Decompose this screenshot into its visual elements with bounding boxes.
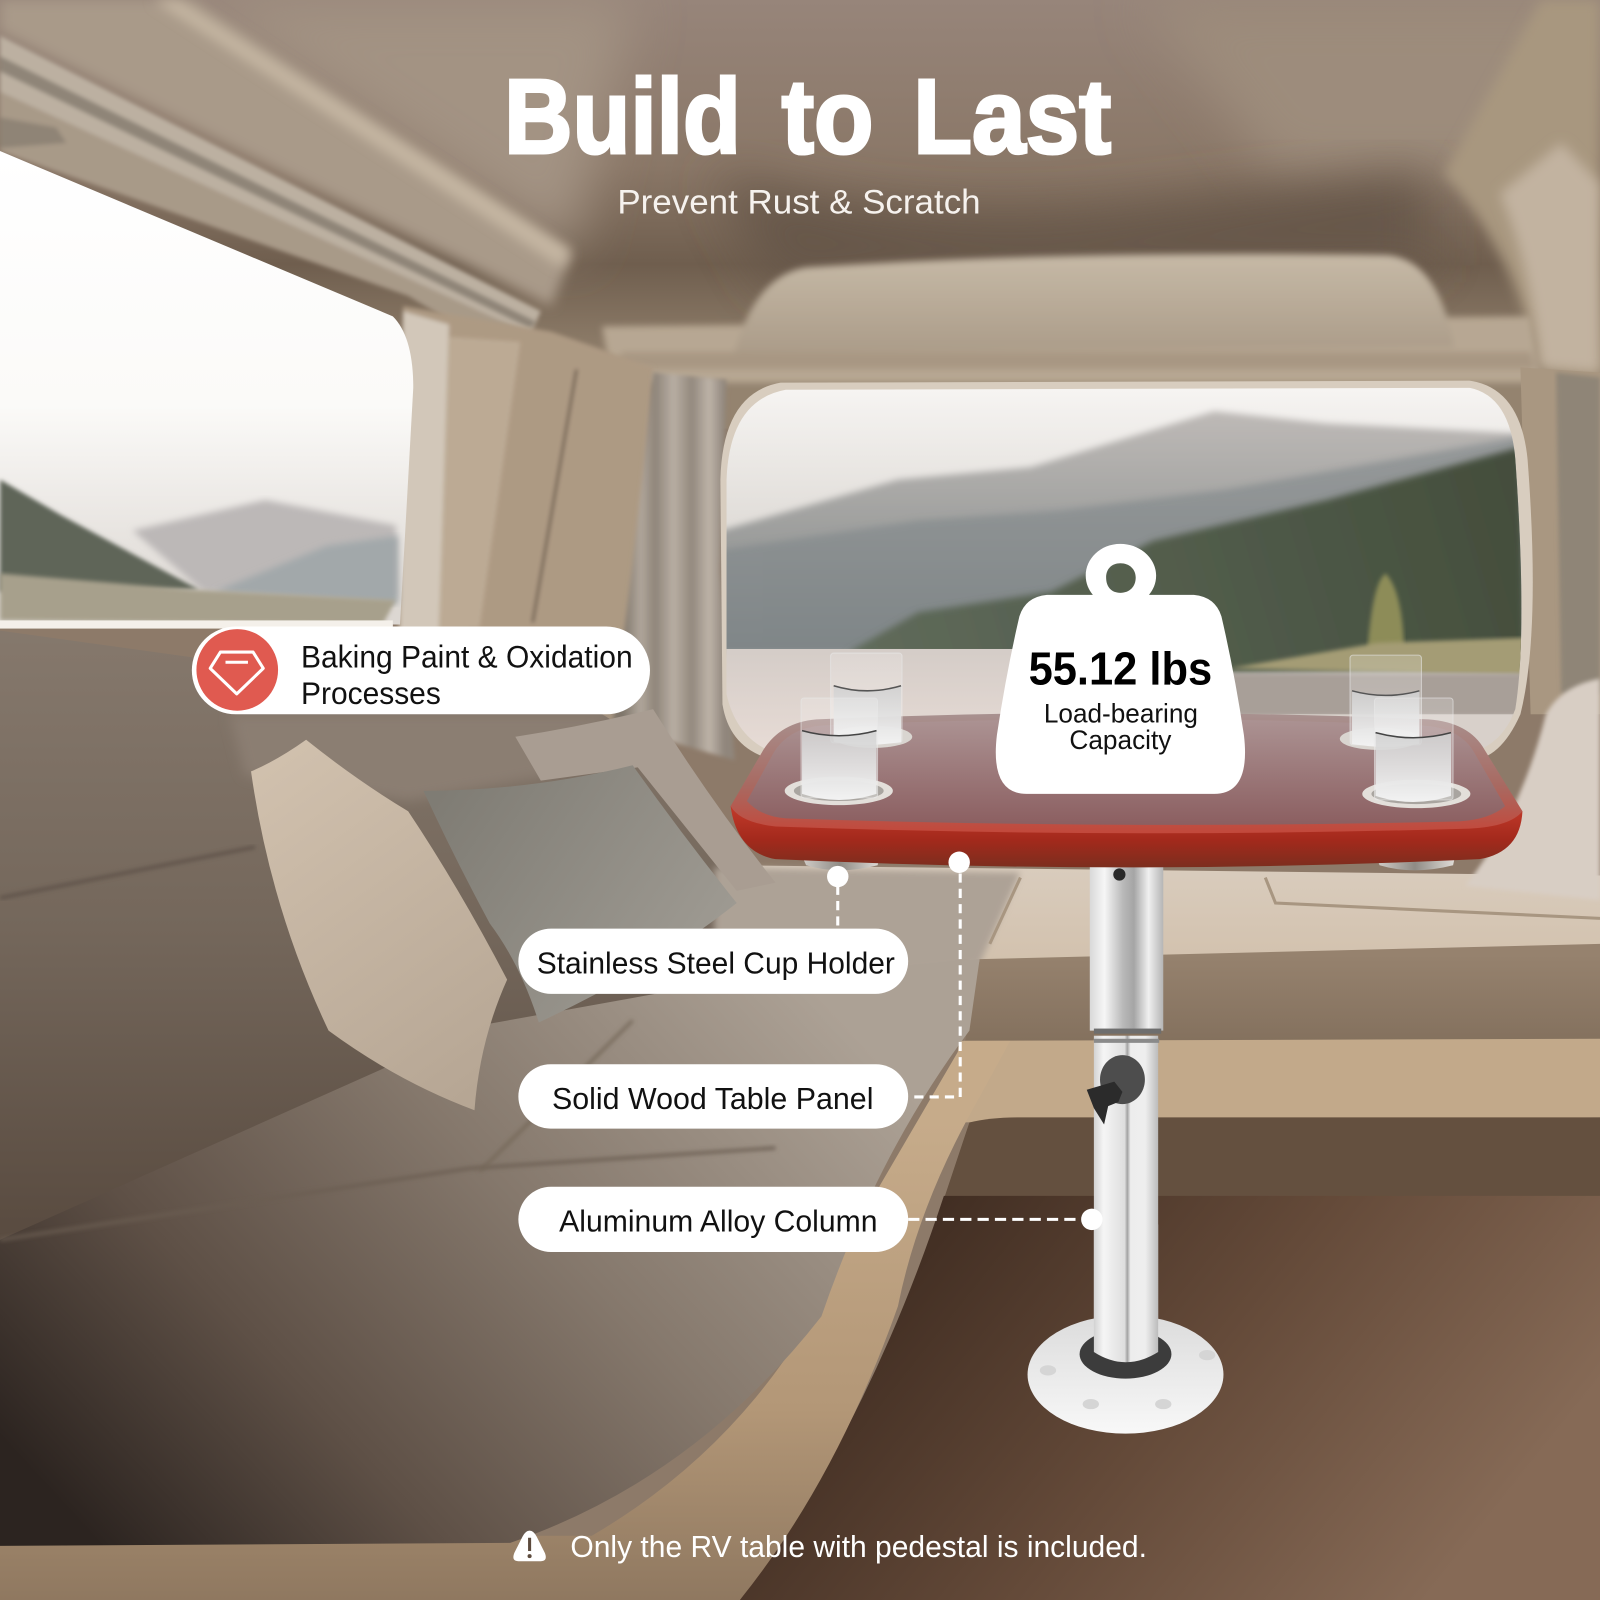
pillow: back grey [515, 709, 776, 891]
bench wooden trim [0, 1041, 1010, 1600]
leader: table panel [908, 852, 970, 1097]
callout: baking paint [192, 627, 650, 714]
capacity label: Load-bearing [1044, 698, 1198, 728]
title [504, 58, 1111, 176]
left window [0, 151, 413, 629]
label: aluminum alloy column: Aluminum Alloy Column [559, 1205, 878, 1239]
pedestal column [1090, 862, 1163, 1352]
icon: warning triangle [513, 1531, 546, 1561]
table panel [731, 713, 1522, 867]
trim and dark under-bench [944, 1039, 1600, 1199]
ceiling [0, 0, 1600, 429]
callout text: Baking Paint & Oxidation [301, 638, 633, 674]
callout text: Processes [301, 675, 441, 711]
callout text [301, 638, 633, 711]
label: aluminum alloy column [518, 1187, 908, 1252]
right wall [1520, 367, 1600, 714]
weight badge: load-bearing capacity [996, 544, 1245, 794]
cup holder rings and glasses [785, 653, 1470, 808]
pillow: beige [251, 740, 507, 1110]
floor [740, 1196, 1600, 1600]
weight shape [996, 544, 1245, 794]
overhead cabinet [602, 254, 1541, 383]
leader: column [908, 1209, 1103, 1230]
icon: diamond in red circle [196, 629, 278, 711]
cushion right [1465, 679, 1600, 900]
label: stainless steel cup holder [518, 929, 908, 994]
pedestal knob [1087, 1055, 1145, 1124]
product: RV table [731, 653, 1522, 1434]
pillow: grey [423, 765, 737, 1022]
title: Last [913, 58, 1111, 176]
leader: cup holder [827, 866, 848, 931]
title: to [782, 58, 873, 176]
capacity value: 55.12 lbs [1029, 643, 1212, 695]
label: solid wood table panel: Solid Wood Table Panel [552, 1082, 873, 1116]
footer note [513, 1530, 1147, 1564]
pedestal base [1028, 1224, 1223, 1434]
label: solid wood table panel [518, 1064, 908, 1129]
curtain [612, 372, 735, 760]
capacity label: Capacity [1069, 725, 1172, 755]
title: Build [504, 58, 741, 176]
sofa back [0, 631, 776, 1240]
capacity label [1044, 698, 1198, 755]
window rail left [0, 36, 541, 357]
right sofa [714, 865, 1600, 1046]
side wall between windows [398, 306, 653, 745]
note text: Only the RV table with pedestal is included. [570, 1530, 1147, 1564]
cup holders under the table [798, 847, 1457, 870]
sofa seat [0, 959, 980, 1546]
subtitle: Prevent Rust & Scratch [617, 183, 981, 221]
right window [714, 378, 1533, 765]
callout pill [192, 627, 650, 714]
label: stainless steel cup holder: Stainless Steel Cup Holder [537, 946, 895, 980]
